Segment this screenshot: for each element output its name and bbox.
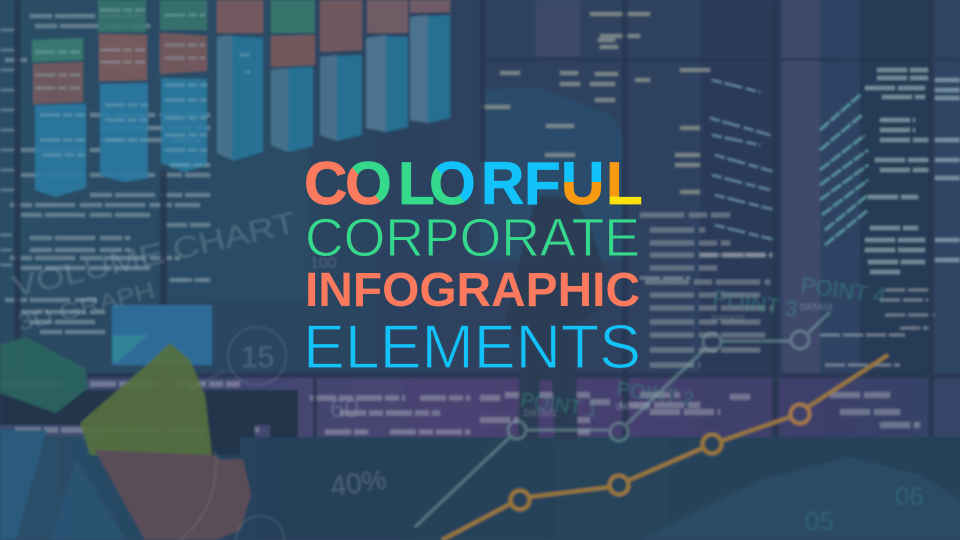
mullions bbox=[14, 0, 934, 437]
teal segment bbox=[112, 335, 148, 362]
column 6 bbox=[320, 0, 362, 141]
title line: colorful: COLORFUL bbox=[304, 150, 643, 217]
column 8 bbox=[410, 0, 450, 123]
blue segment left bbox=[0, 430, 47, 540]
upper pale wall bbox=[536, 0, 580, 56]
floor reflection bbox=[640, 457, 960, 540]
point 2: POINT 2 bbox=[615, 378, 695, 411]
mid right lights bbox=[640, 255, 935, 365]
thin guide lines bbox=[180, 370, 225, 540]
label: 06: 06 bbox=[895, 481, 924, 511]
purple band lights left bbox=[0, 384, 470, 432]
olive segment bbox=[80, 343, 212, 455]
column 5 bbox=[271, 0, 315, 152]
red segment bbox=[95, 450, 251, 540]
left wall tint bbox=[0, 0, 310, 300]
label: 40 percent: 40% bbox=[329, 463, 388, 502]
upper centre lights bbox=[480, 14, 710, 192]
point labels bbox=[519, 272, 924, 536]
point 4: POINT 4 bbox=[799, 272, 887, 309]
point 3: POINT 3 bbox=[711, 285, 799, 322]
label: volume chart: VOLUME CHART bbox=[9, 206, 299, 304]
monitor bbox=[112, 305, 212, 365]
3D bar chart bbox=[32, 0, 450, 197]
man silhouette bbox=[505, 195, 604, 440]
teal line chart bbox=[415, 312, 830, 527]
column 1 bbox=[32, 38, 86, 197]
right tower lights bbox=[865, 70, 960, 272]
purple lower band bbox=[0, 375, 960, 438]
column 3 bbox=[160, 0, 207, 172]
tilted tower lights bbox=[710, 80, 775, 240]
label: 3d graph: 3D GRAPH bbox=[15, 277, 157, 336]
markers bbox=[510, 490, 530, 510]
green segment bbox=[0, 337, 88, 413]
orange line chart bbox=[442, 355, 888, 540]
point 1: DATA01 bbox=[524, 408, 557, 418]
label: 60: 60 bbox=[330, 393, 359, 423]
point 3: DATA02 bbox=[712, 314, 745, 324]
title line: elements: ELEMENTS bbox=[303, 313, 641, 382]
line bbox=[415, 312, 830, 527]
label: 100: 100 bbox=[310, 255, 337, 272]
purple band lights right bbox=[480, 395, 920, 432]
point 2: DATA02 bbox=[616, 402, 649, 412]
markers bbox=[508, 421, 526, 439]
bar chart light streaks bbox=[35, 10, 250, 165]
column 7 bbox=[366, 0, 408, 132]
tower shade right bbox=[860, 0, 930, 375]
light pillar bbox=[783, 0, 820, 437]
window lights bbox=[0, 14, 960, 432]
floor bbox=[0, 437, 960, 540]
right tower angled lights bbox=[820, 95, 868, 245]
lights far left bbox=[0, 30, 14, 265]
dark tower bbox=[700, 0, 780, 375]
title line: infographic: INFOGRAPHIC bbox=[305, 264, 640, 317]
point 1: POINT 1 bbox=[519, 389, 599, 422]
pale building block bbox=[480, 88, 625, 260]
column 4 bbox=[217, 0, 263, 161]
blue segment bottom bbox=[50, 460, 126, 540]
gauge ring bbox=[236, 516, 284, 540]
transoms bbox=[0, 58, 960, 378]
ghost labels bbox=[9, 206, 388, 540]
label: 05: 05 bbox=[805, 506, 834, 536]
line bbox=[442, 355, 888, 540]
point 4: DATA04 bbox=[800, 302, 833, 312]
pie chart bbox=[0, 335, 251, 540]
title block bbox=[303, 150, 643, 382]
column 2 bbox=[98, 0, 148, 182]
desk bbox=[0, 390, 298, 455]
left tower lights bbox=[5, 16, 210, 332]
title line: corporate: CORPORATE bbox=[305, 208, 640, 268]
lower centre lights bbox=[640, 215, 775, 365]
label: 15 bbox=[228, 327, 286, 385]
label: 15: 15 bbox=[241, 341, 274, 374]
